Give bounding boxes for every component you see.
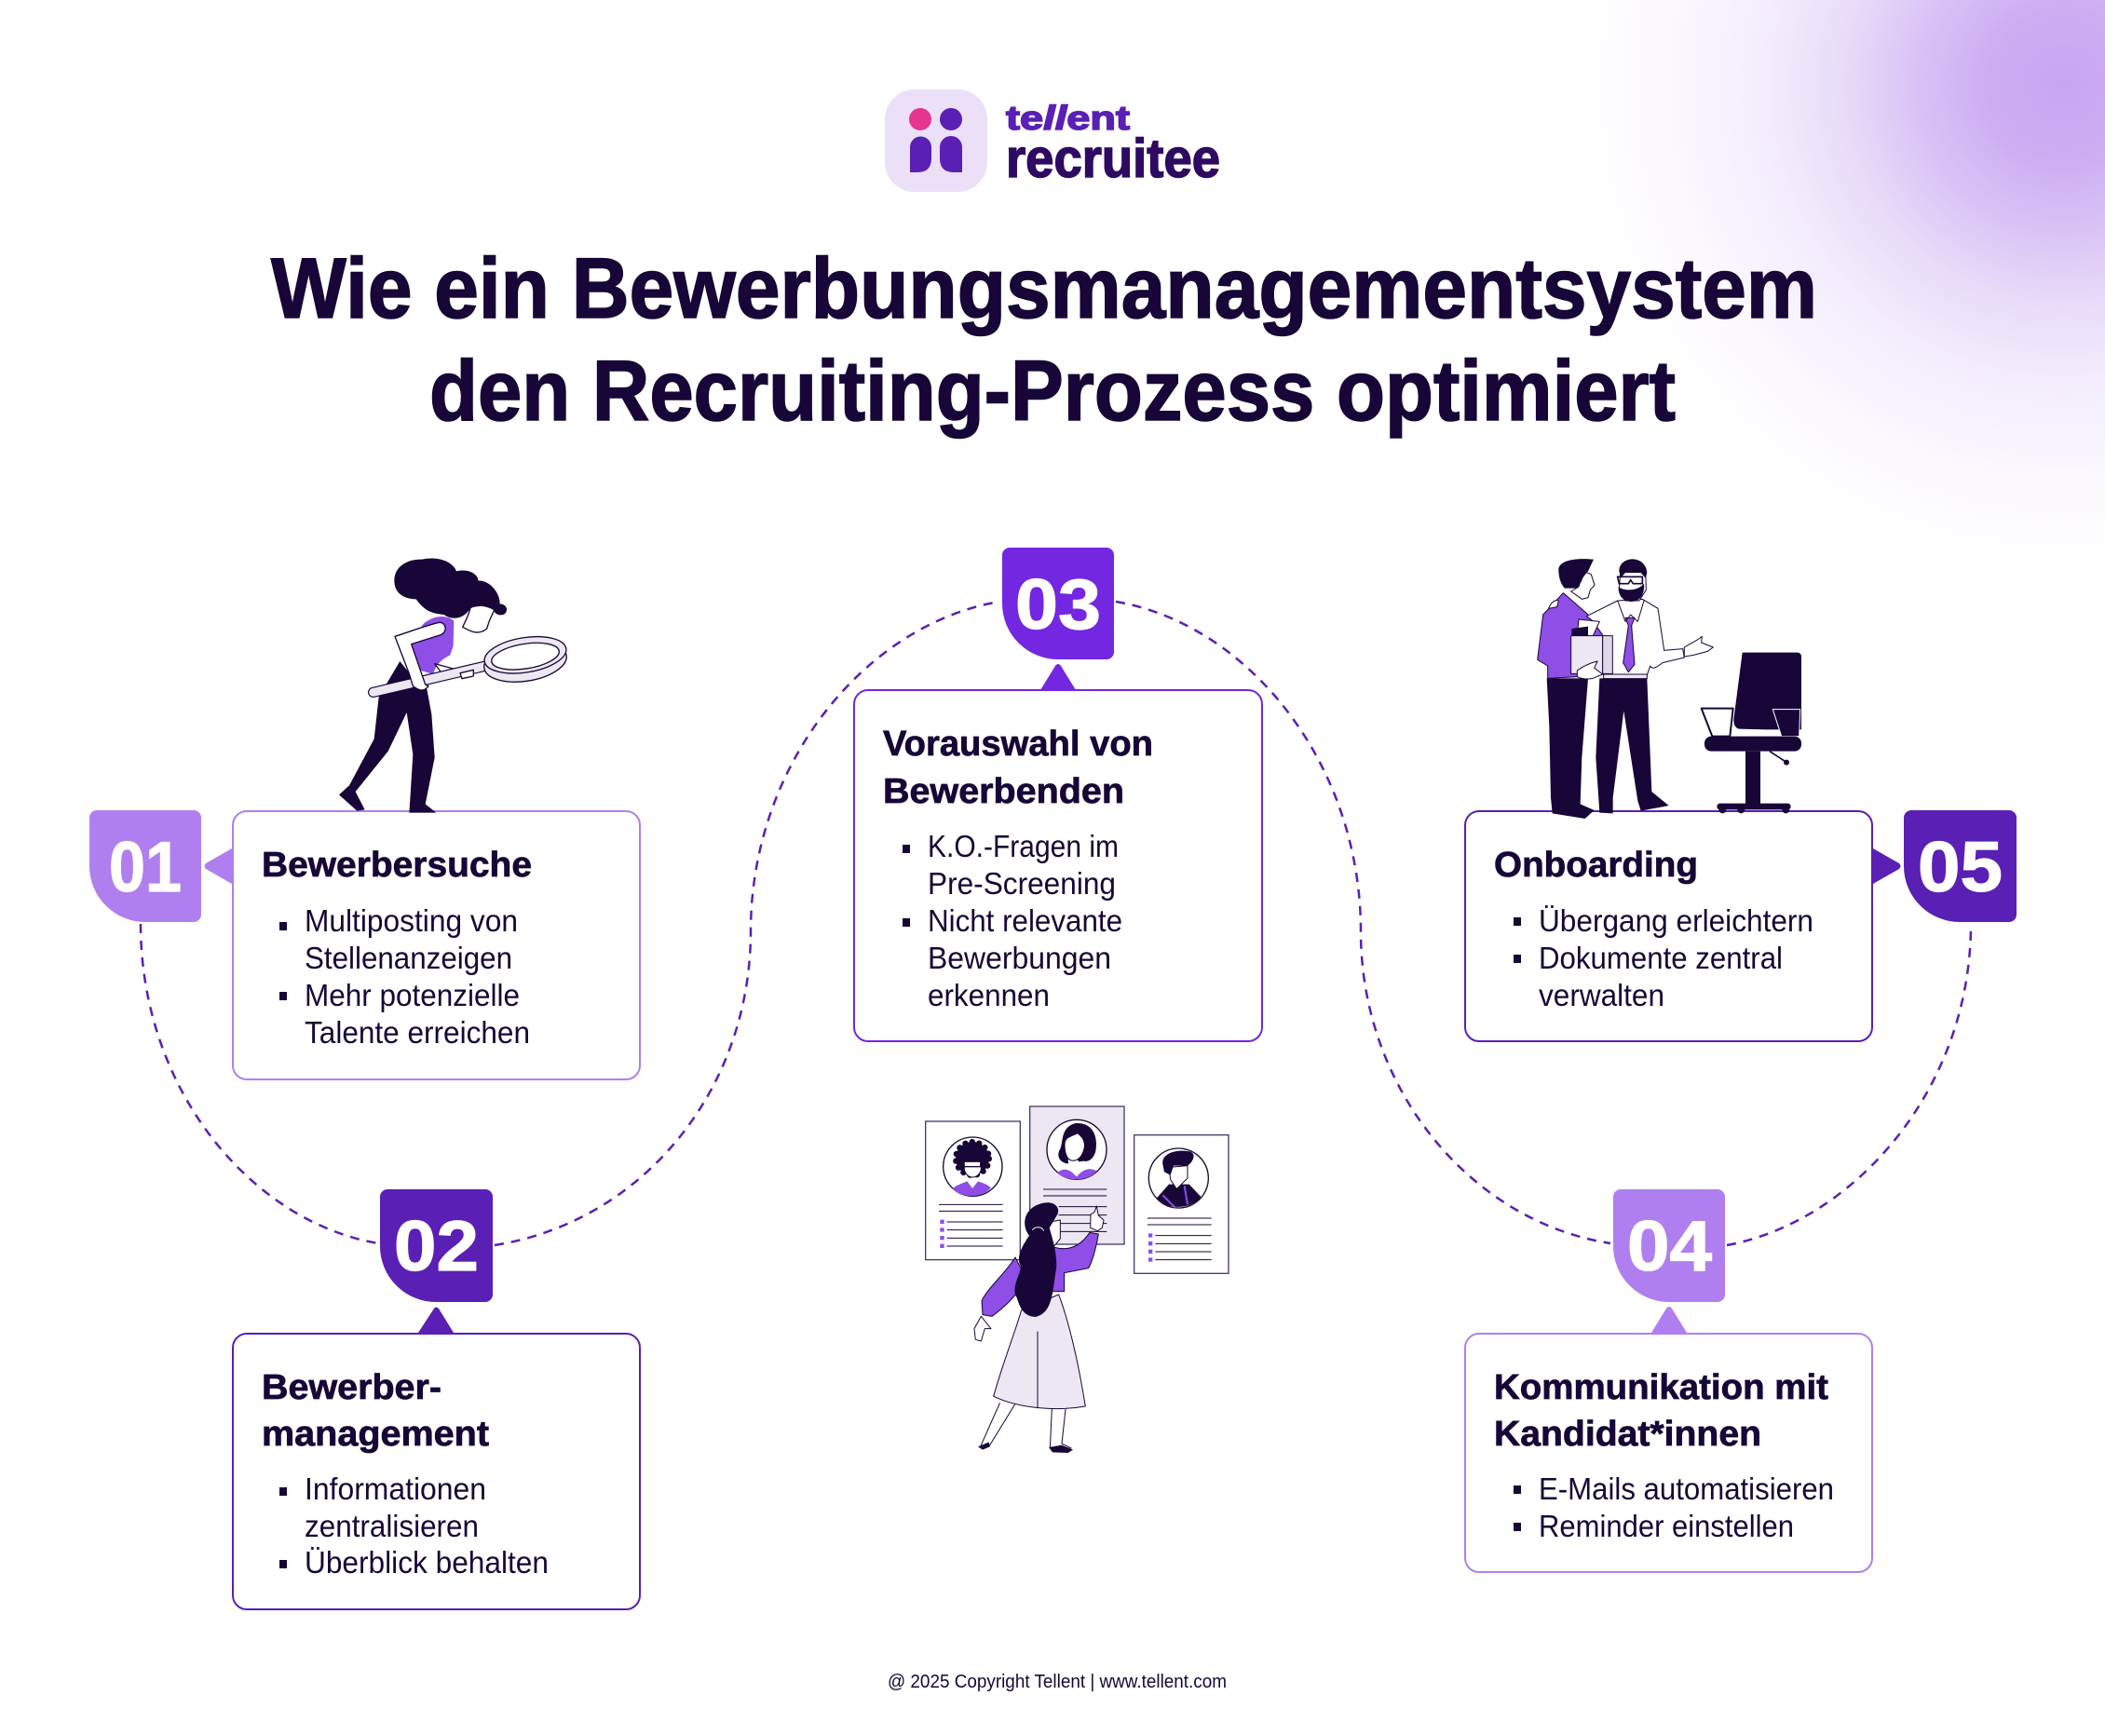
bullet list: Talente erreichen <box>305 1015 530 1050</box>
lower arm <box>435 664 454 672</box>
heading: Bewerber- <box>262 1368 441 1407</box>
bullet list: Pre-Screening <box>928 866 1116 901</box>
bullet list: K.O.-Fragen im <box>928 829 1119 863</box>
left arm and hand <box>982 1257 1026 1316</box>
bullet list: Mehr potenzielle <box>305 978 520 1012</box>
card frame <box>233 811 640 1079</box>
bullet list: Übergang erleichtern <box>1539 903 1813 938</box>
bullet list: Nicht relevante <box>928 903 1122 938</box>
shoulder hand <box>1549 601 1558 608</box>
centre CV <box>1030 1106 1124 1244</box>
man one face <box>1571 571 1595 599</box>
background glow <box>1490 0 2105 652</box>
right CV <box>1134 1135 1229 1273</box>
logo <box>885 89 1220 192</box>
belt <box>1604 674 1647 679</box>
legs <box>339 661 436 813</box>
magnifier lens <box>482 636 569 687</box>
title: Wie ein Bewerbungsmanagementsystem <box>271 241 1817 336</box>
bullet list: Stellenanzeigen <box>305 941 512 975</box>
number badge: 04 <box>1627 1207 1712 1286</box>
pointer <box>418 1308 454 1333</box>
bullet list <box>279 903 530 1050</box>
illustration: woman with magnifying glass <box>339 558 569 813</box>
man one hair <box>1558 559 1594 589</box>
bullet list: Dokumente zentral <box>1539 941 1783 975</box>
heading: Kandidat*innen <box>1494 1415 1761 1454</box>
title <box>271 241 1817 439</box>
logo wordmark tellent: tellent <box>1006 99 1130 137</box>
card 02 <box>233 1189 640 1609</box>
card 03 <box>854 548 1262 1041</box>
bullet list: Überblick behalten <box>305 1545 549 1580</box>
number badge <box>1904 810 2017 922</box>
top <box>410 617 454 674</box>
tie <box>1623 617 1635 672</box>
upper arm <box>395 622 445 690</box>
number badge: 03 <box>1015 565 1101 644</box>
man two hand <box>1684 636 1713 657</box>
heading: management <box>262 1415 489 1454</box>
bullet list: verwalten <box>1539 978 1664 1012</box>
chair armrests <box>1702 709 1733 737</box>
heading: Bewerbenden <box>883 772 1124 811</box>
bullet list <box>903 829 1122 1012</box>
bullet list <box>279 1472 549 1580</box>
magnifier handle <box>373 666 486 692</box>
heading: Kommunikation mit <box>1494 1368 1828 1407</box>
bullet list: Bewerbungen <box>928 941 1111 975</box>
illustration: two men and office chair <box>1538 559 1801 819</box>
man one hand <box>1577 661 1603 679</box>
number badge <box>1002 548 1114 659</box>
heading <box>262 1368 489 1454</box>
raised arm <box>1048 1232 1098 1292</box>
hand pointing <box>1091 1206 1104 1231</box>
bullet list <box>1514 903 1813 1012</box>
dashed connector path <box>141 602 1971 1245</box>
card 05 <box>1465 810 2017 1041</box>
illustration: woman reviewing CVs <box>926 1106 1229 1453</box>
title: den Recruiting-Prozess optimiert <box>429 344 1676 439</box>
number badge: 02 <box>394 1207 479 1286</box>
man two head <box>1619 568 1646 601</box>
fingers <box>460 670 473 679</box>
chair back <box>1733 653 1801 729</box>
heading: Onboarding <box>1494 846 1698 885</box>
bullet list: E-Mails automatisieren <box>1539 1472 1834 1506</box>
chair column and base <box>1745 752 1760 804</box>
logo icon <box>885 89 987 192</box>
left CV <box>926 1121 1020 1260</box>
bullet list: erkennen <box>928 978 1050 1012</box>
heading: Vorauswahl von <box>883 725 1153 764</box>
box <box>1571 636 1603 673</box>
heading <box>1494 1368 1828 1454</box>
pointer <box>1873 848 1900 884</box>
logo wordmark recruitee: recruitee <box>1006 129 1220 189</box>
man two shirt <box>1586 599 1684 675</box>
neck and face <box>1040 1220 1060 1248</box>
skirt <box>994 1295 1085 1409</box>
card 01 <box>89 810 640 1079</box>
legs and shoes <box>978 1404 1073 1453</box>
face <box>463 605 495 632</box>
pointer <box>1040 664 1076 690</box>
pointer <box>205 848 232 884</box>
number badge: 05 <box>1918 828 2003 907</box>
chair seat <box>1704 737 1801 752</box>
number badge: 01 <box>109 828 182 907</box>
heading <box>883 725 1153 811</box>
number badge <box>1613 1189 1725 1302</box>
bullet list <box>1514 1472 1834 1543</box>
hair <box>394 558 507 618</box>
heading: Bewerbersuche <box>262 846 532 885</box>
box contents <box>1577 619 1599 636</box>
bullet list: Informationen <box>305 1472 486 1506</box>
hair <box>1014 1202 1058 1317</box>
footer copyright: @ 2025 Copyright Tellent | www.tellent.com <box>888 1672 1227 1692</box>
number badge <box>89 810 201 922</box>
card 04 <box>1465 1189 1872 1572</box>
pointer <box>1651 1307 1687 1333</box>
scrunchie <box>1032 1227 1044 1231</box>
collar <box>1618 601 1644 621</box>
bullet list: Multiposting von <box>305 903 518 938</box>
man one shirt <box>1538 593 1605 678</box>
bullet list: Reminder einstellen <box>1539 1509 1794 1543</box>
man two trousers <box>1596 678 1669 813</box>
bullet list: zentralisieren <box>305 1509 479 1543</box>
number badge <box>380 1189 493 1302</box>
glasses <box>1618 576 1642 584</box>
man one trousers <box>1547 678 1595 819</box>
